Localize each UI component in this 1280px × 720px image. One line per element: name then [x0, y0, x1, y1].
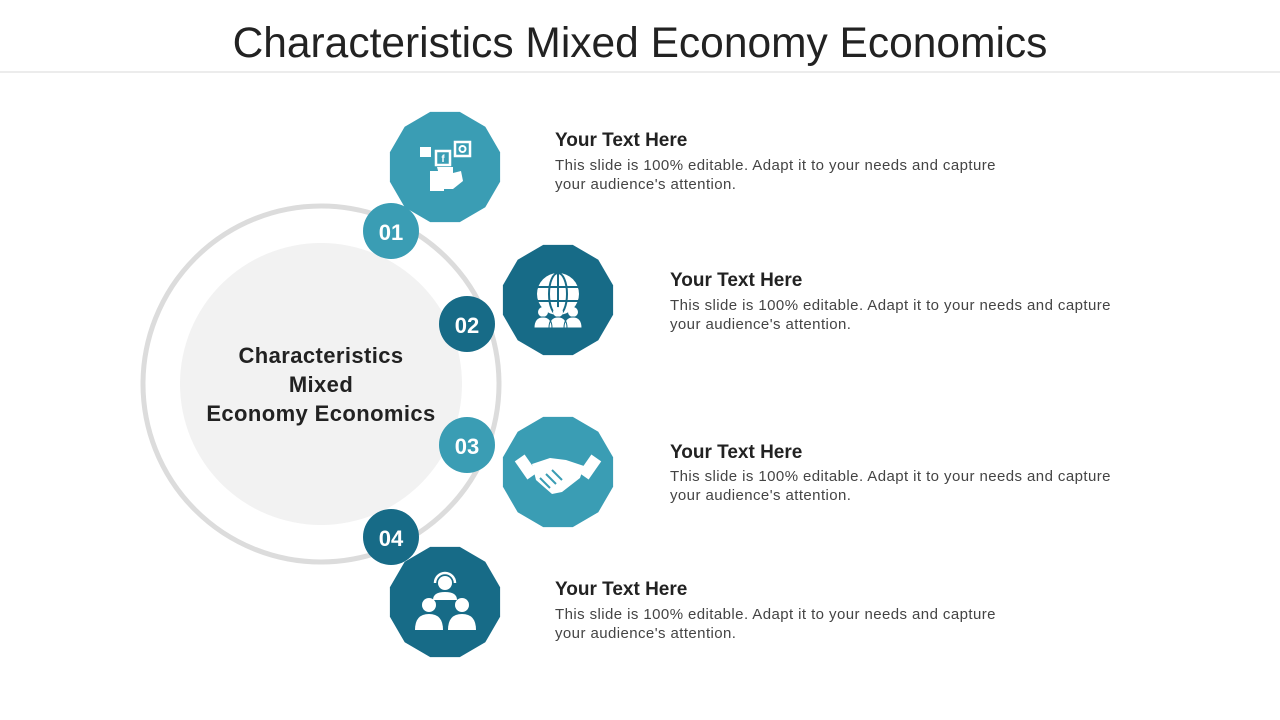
number 02 [439, 296, 495, 352]
number 03: 03 [455, 434, 479, 459]
title: Characteristics Mixed Economy Economics [233, 20, 1047, 67]
center circle with title [180, 243, 462, 525]
number 03 [439, 417, 495, 473]
text block 3: Your Text Here [670, 442, 802, 463]
number 04: 04 [379, 526, 404, 551]
text block 4: your audience's attention. [555, 625, 736, 642]
text block 4 [555, 579, 996, 642]
text block 1 [555, 130, 996, 193]
text block 3 [670, 442, 1111, 504]
center circle with title: Economy Economics [206, 401, 436, 426]
text block 3: This slide is 100% editable. Adapt it to your needs and capture [670, 468, 1111, 485]
item 1 icon: social media phone: f [441, 154, 445, 165]
text block 2: your audience's attention. [670, 316, 851, 333]
outer ring [143, 206, 499, 562]
text block 4: This slide is 100% editable. Adapt it to your needs and capture [555, 606, 996, 623]
center circle with title: Characteristics [239, 343, 403, 368]
item 4 icon: support agents [390, 547, 500, 657]
item 3 icon: handshake [503, 417, 613, 527]
text block 1: your audience's attention. [555, 176, 736, 193]
number 01 [363, 203, 419, 259]
text block 2: This slide is 100% editable. Adapt it to your needs and capture [670, 297, 1111, 314]
number 01: 01 [379, 220, 403, 245]
text block 1: Your Text Here [555, 130, 687, 151]
text block 1: This slide is 100% editable. Adapt it to your needs and capture [555, 157, 996, 174]
text block 2: Your Text Here [670, 270, 802, 291]
number 04 [363, 509, 419, 565]
item 1 icon: social media phone [390, 112, 500, 222]
center circle with title: Mixed [289, 372, 353, 397]
item 2 icon: globe with people [503, 245, 613, 355]
text block 2 [670, 270, 1111, 333]
text block 3: your audience's attention. [670, 487, 851, 504]
number 02: 02 [455, 313, 479, 338]
text block 4: Your Text Here [555, 579, 687, 600]
